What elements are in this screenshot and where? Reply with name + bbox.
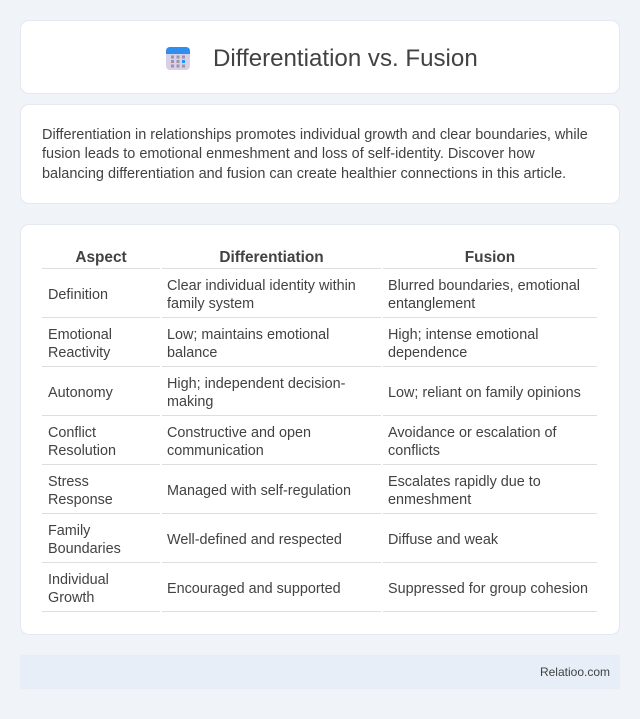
intro text [42, 126, 588, 182]
row: Individual Growth: Growth [48, 590, 94, 606]
row: Emotional Reactivity [48, 327, 538, 361]
row: Autonomy [48, 376, 581, 410]
row: Stress Response [48, 474, 541, 508]
row: Family Boundaries: Family [48, 523, 90, 539]
row: Emotional Reactivity: Low; maintains emotional [167, 327, 329, 343]
row: Stress Response: enmeshment [388, 492, 471, 508]
row: Emotional Reactivity: Emotional [48, 327, 112, 343]
intro card [20, 104, 620, 204]
row: Conflict Resolution: communication [167, 443, 264, 459]
row: Stress Response: Managed with self-regulation [167, 483, 351, 499]
row: Conflict Resolution: Conflict [48, 425, 96, 441]
intro text: Differentiation in relationships promotes individual growth and clear boundaries, while [42, 126, 588, 142]
icon: calendar [166, 47, 190, 70]
header: Differentiation: Differentiation [219, 249, 324, 266]
row: Emotional Reactivity: High; intense emotional [388, 327, 538, 343]
row: Autonomy: Autonomy [48, 385, 113, 401]
row: Individual Growth [48, 572, 588, 606]
row: Autonomy: Low; reliant on family opinions [388, 385, 581, 401]
row: Definition: Definition [48, 287, 108, 303]
row: Definition: Blurred boundaries, emotional [388, 278, 580, 294]
title card [20, 20, 620, 94]
header: Fusion: Fusion [465, 249, 515, 266]
row: Conflict Resolution: conflicts [388, 443, 440, 459]
row: Definition: family system [167, 296, 254, 312]
row: Conflict Resolution: Constructive and open [167, 425, 311, 441]
row: Conflict Resolution: Resolution [48, 443, 116, 459]
intro text: fusion leads to emotional enmeshment and loss of self-identity. Discover how [42, 146, 535, 162]
row: Individual Growth: Encouraged and supported [167, 581, 341, 597]
footer bar [20, 655, 620, 689]
row: Definition [48, 278, 580, 312]
row: Conflict Resolution [48, 425, 557, 459]
row: Emotional Reactivity: balance [167, 345, 217, 361]
row: Individual Growth: Individual [48, 572, 109, 588]
row: Stress Response: Escalates rapidly due to [388, 474, 541, 490]
row: Individual Growth: Suppressed for group cohesion [388, 581, 588, 597]
row: Autonomy: making [167, 394, 213, 410]
row: Emotional Reactivity: Reactivity [48, 345, 110, 361]
row: Family Boundaries: Diffuse and weak [388, 532, 498, 548]
row: Emotional Reactivity: dependence [388, 345, 467, 361]
row: Stress Response: Stress [48, 474, 89, 490]
row: Family Boundaries: Well-defined and respected [167, 532, 342, 548]
row: Family Boundaries: Boundaries [48, 541, 121, 557]
row: Definition: Clear individual identity within [167, 278, 356, 294]
footer credit: Relatioo.com [540, 665, 610, 679]
header: Aspect: Aspect [75, 249, 127, 266]
row: Definition: entanglement [388, 296, 475, 312]
row: Family Boundaries [48, 523, 498, 557]
table card [20, 224, 620, 635]
row: Autonomy: High; independent decision- [167, 376, 345, 392]
title: Differentiation vs. Fusion [213, 45, 478, 72]
row: Stress Response: Response [48, 492, 113, 508]
intro text: balancing differentiation and fusion can create healthier connections in this article. [42, 166, 566, 182]
row: Conflict Resolution: Avoidance or escalation of [388, 425, 557, 441]
